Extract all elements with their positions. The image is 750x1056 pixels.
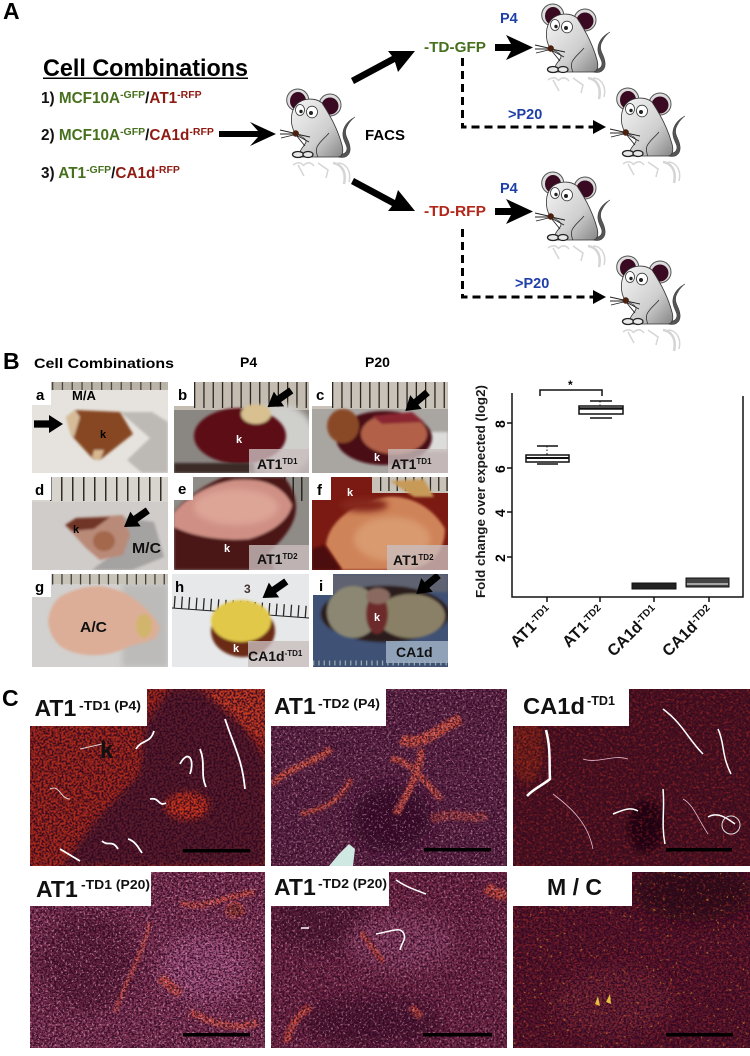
text: combination 1: AT1 (149, 90, 178, 107)
arrow: to TD-RFP (351, 178, 415, 211)
histology AT1-TD1 P4: AT1 (34, 695, 76, 721)
text: combination 3: CA1d (115, 165, 155, 182)
photo f (312, 477, 448, 570)
histology AT1-TD2 P4: AT1 (274, 693, 316, 719)
y axis ticks and values: 2 (492, 554, 508, 562)
photo d: M/C (132, 540, 161, 557)
photo d: d (35, 482, 44, 499)
histology AT1-TD2 P4: -TD2 (P4) (318, 696, 380, 711)
icon: mouse P4 GFP (535, 4, 610, 99)
x label AT1-TD1: AT1 (508, 619, 540, 651)
y axis ticks and values: 8 (492, 420, 508, 428)
heading: Cell Combinations: Cell Combinations (43, 55, 248, 82)
photo h: 3 (244, 582, 251, 596)
box CA1d-TD2 (686, 578, 729, 587)
photo b: AT1 (257, 456, 282, 472)
icon: source mouse (280, 89, 355, 184)
arrow: combinations to mouse (219, 122, 276, 146)
text: combination 3: / (111, 165, 116, 182)
histology AT1-TD2 P20: AT1 (274, 874, 316, 900)
photo c: AT1 (391, 456, 416, 472)
y axis ticks and values: 4 (492, 509, 508, 517)
histology AT1-TD1 P4: k (100, 737, 114, 764)
arrow: P4 lower (495, 199, 533, 224)
photo e: AT1 (257, 551, 282, 567)
text: combination 1: -GFP (120, 89, 145, 101)
text: combination 1: -RFP (177, 89, 202, 101)
heading: P20 column: P20 (365, 354, 390, 370)
significance bracket: * (568, 378, 573, 392)
panel: B kidney photographs (3, 348, 449, 667)
photo i: CA1d (396, 644, 433, 660)
histology AT1-TD1 P4: -TD1 (P4) (79, 698, 141, 713)
photo h (172, 574, 309, 667)
text: P20 upper: >P20 (508, 107, 542, 123)
x label AT1-TD2: -TD2 (580, 603, 604, 626)
arrow: P4 upper (495, 35, 533, 60)
text: combination 3: 3) AT1 (41, 165, 86, 182)
panel: C histology (2, 685, 750, 1048)
text: combination 3: -RFP (155, 164, 180, 176)
text: FACS: FACS (365, 128, 405, 144)
photo c: TD1 (416, 457, 432, 466)
y axis title: Fold change over expected (log2) (473, 385, 488, 598)
histology AT1-TD2 P4 (271, 689, 507, 866)
arrow: to TD-GFP (351, 51, 415, 84)
text: combination 1: 1) MCF10A (41, 90, 120, 107)
histology M/C (513, 872, 750, 1048)
axis lines (512, 393, 743, 597)
text: combination 2: 2) MCF10A (41, 127, 120, 144)
box CA1d-TD1 (632, 583, 676, 589)
arrow: P20 lower dashed (462, 229, 606, 304)
photo b: b (178, 387, 187, 404)
text: P20 lower: >P20 (515, 276, 549, 292)
text: P4 lower: P4 (500, 181, 518, 197)
photo i: i (319, 578, 323, 595)
histology CA1d-TD1: -TD1 (587, 693, 615, 708)
photo g: g (35, 579, 44, 596)
x label CA1d-TD2: -TD2 (689, 603, 713, 626)
heading: panel C letter: C (2, 685, 19, 711)
photo c: k (374, 452, 381, 464)
box AT1-TD1 (526, 446, 569, 464)
photo i: k (374, 612, 381, 624)
photo d (32, 477, 168, 570)
photo g: A/C (80, 619, 107, 636)
text: TD-RFP: -TD-RFP (424, 203, 486, 220)
photo b: k (236, 434, 243, 446)
y axis ticks and values: 6 (492, 465, 508, 473)
x label CA1d-TD1: CA1d (605, 619, 646, 660)
icon: mouse P20 GFP (610, 88, 685, 183)
photo f: f (317, 482, 323, 499)
text: P4 upper: P4 (500, 11, 518, 27)
x label AT1-TD1: -TD1 (528, 603, 552, 626)
photo e: e (178, 481, 186, 498)
photo h: -TD1 (285, 649, 303, 658)
text: TD-GFP: -TD-GFP (424, 39, 486, 56)
photo a: a (36, 387, 45, 404)
photo c: c (316, 387, 324, 404)
significance bracket (540, 378, 602, 396)
histology AT1-TD1 P20: AT1 (36, 876, 78, 902)
box AT1-TD2 (579, 401, 623, 418)
histology AT1-TD2 P20 (271, 872, 507, 1048)
text: combination 1: / (145, 90, 150, 107)
text: combination 2: / (145, 127, 150, 144)
photo a: k (100, 429, 107, 441)
text: combination 3: -GFP (86, 164, 111, 176)
arrow: P20 upper dashed (462, 58, 606, 134)
icon: mouse P4 RFP (535, 172, 610, 267)
photo f: AT1 (393, 552, 418, 568)
heading: P4 column: P4 (240, 354, 257, 370)
icon: mouse P20 RFP (610, 256, 685, 351)
photo h: k (233, 643, 240, 655)
photo d: k (73, 524, 80, 536)
x label AT1-TD2: AT1 (560, 619, 592, 651)
photo a: M/A (72, 388, 96, 403)
photo e: TD2 (282, 552, 298, 561)
photo h: h (175, 579, 184, 596)
photo e: k (224, 543, 231, 555)
histology AT1-TD2 P20: -TD2 (P20) (318, 876, 387, 891)
photo a (32, 382, 168, 473)
histology CA1d-TD1 (513, 689, 750, 866)
photo c (312, 382, 448, 473)
photo f: k (347, 487, 354, 499)
histology AT1-TD1 P20 (30, 872, 265, 1048)
x label CA1d-TD2: CA1d (660, 619, 701, 660)
text: combination 2: -RFP (189, 126, 214, 138)
photo b (174, 382, 309, 473)
y axis ticks and values (492, 420, 709, 602)
photo e (174, 477, 309, 570)
heading: B cell combinations: Cell Combinations (34, 355, 174, 371)
photo h: CA1d (248, 648, 285, 664)
photo b: TD1 (282, 457, 298, 466)
text: combination 2: -GFP (120, 126, 145, 138)
chart: fold change box plot (473, 378, 743, 660)
text: combination 2: CA1d (149, 127, 189, 144)
histology AT1-TD1 P20: -TD1 (P20) (81, 877, 150, 892)
histology M/C: M / C (547, 874, 602, 900)
panel: A workflow (3, 0, 685, 351)
histology CA1d-TD1: CA1d (523, 693, 585, 719)
x label CA1d-TD1: -TD1 (634, 603, 658, 626)
histology AT1-TD1 P4 (30, 689, 265, 866)
heading: panel B letter: B (3, 348, 20, 374)
photo g (32, 574, 168, 667)
photo i (313, 574, 448, 667)
photo f: TD2 (418, 553, 434, 562)
